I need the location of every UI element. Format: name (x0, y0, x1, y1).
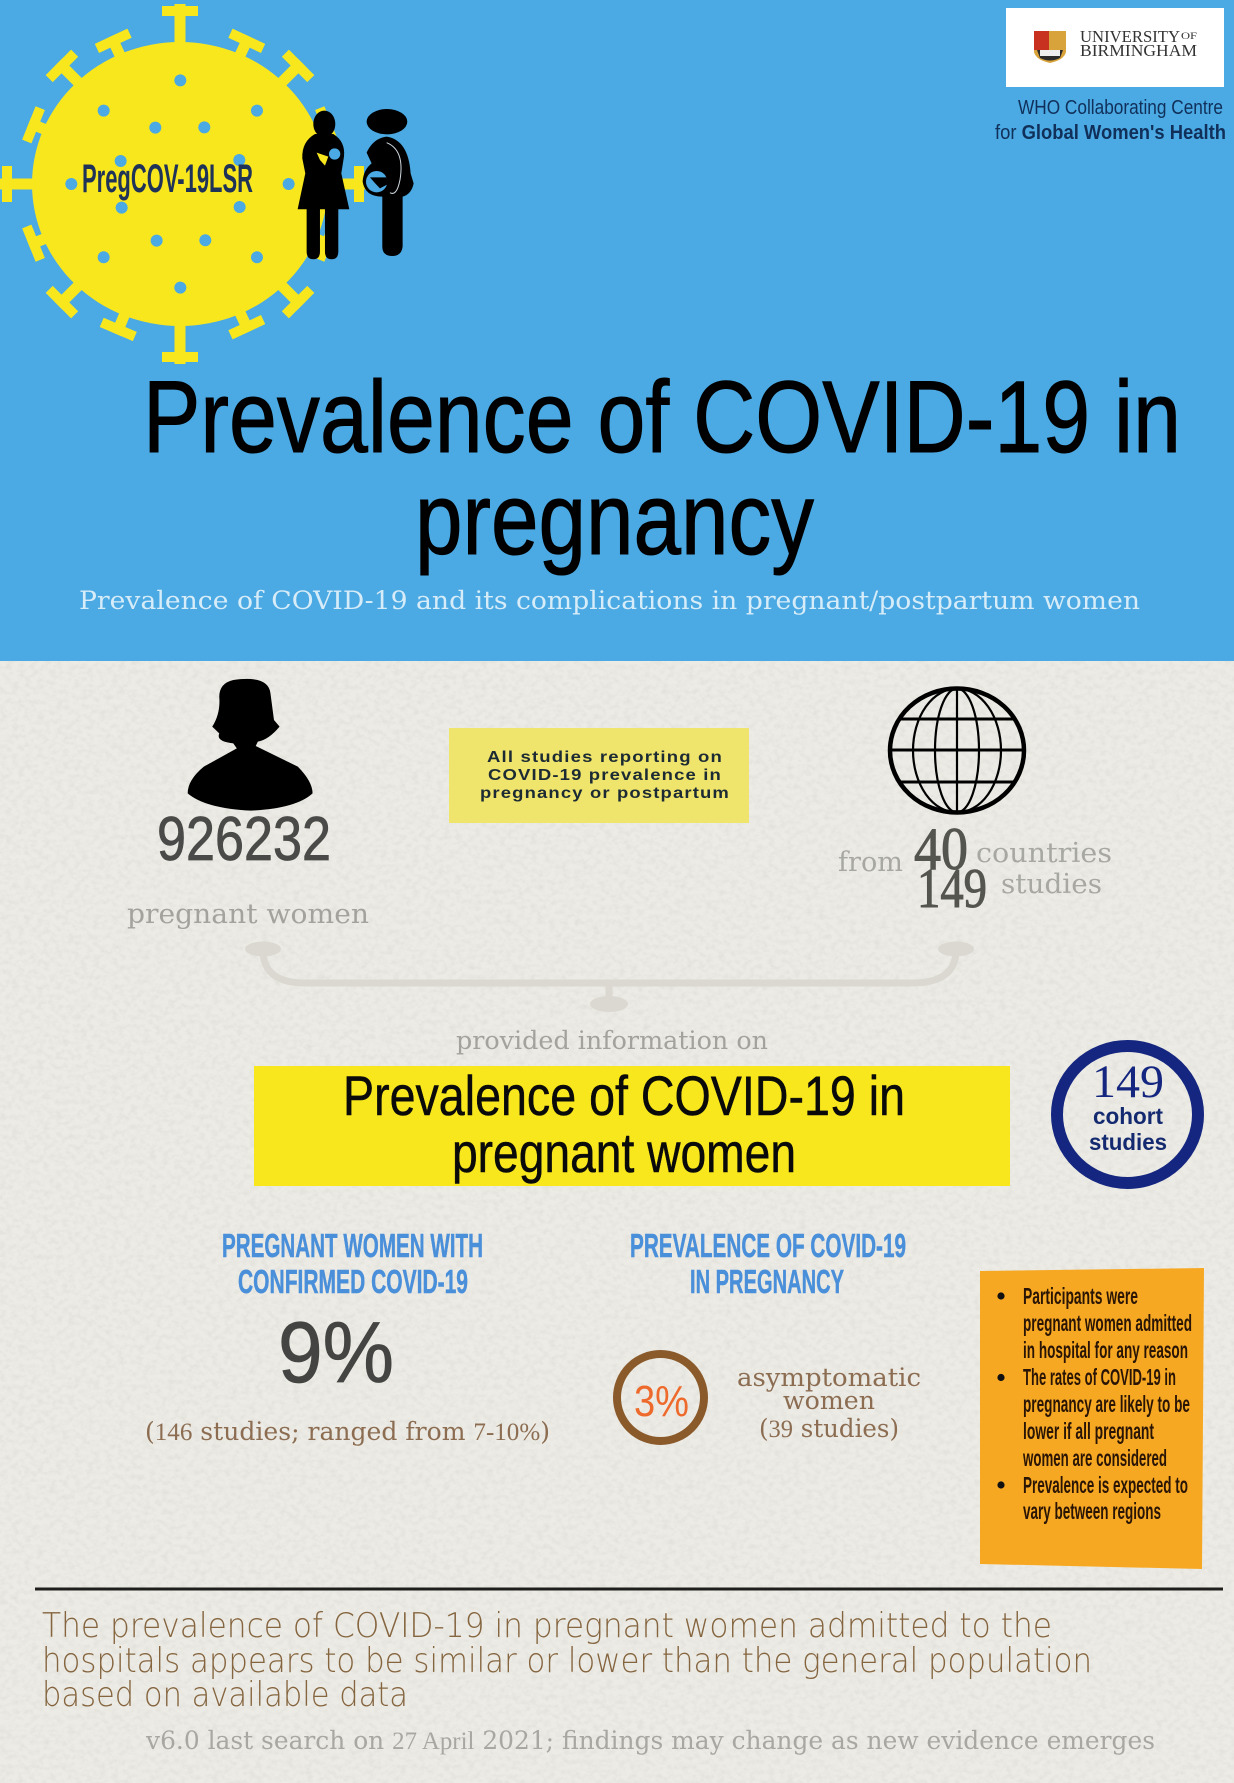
panel: heading prevalence in pregnant women: pregnant women (452, 1121, 796, 1184)
title: pregnancy (415, 462, 814, 576)
text: asymptomatic women: women (783, 1386, 875, 1415)
callout: study scope (449, 728, 749, 823)
subtitle: Prevalence of COVID-19 and its complications in pregnant/postpartum women (79, 586, 1140, 615)
badge: 149 cohort studies: cohort (1093, 1103, 1163, 1129)
badge: 3 percent (617, 1354, 704, 1441)
icon: coronavirus (0, 4, 366, 364)
count: pregnant women: 926232 (157, 805, 331, 874)
heading: pregnant women with confirmed COVID-19: CONFIRMED COVID-19 (238, 1263, 468, 1300)
count: pregnant women: pregnant women (127, 899, 369, 930)
icon: mother holding baby (298, 111, 349, 259)
panel: heading prevalence in pregnant women: Prevalence of COVID-19 in (343, 1064, 905, 1127)
callout: study scope: COVID-19 prevalence in (488, 767, 722, 784)
logo: University of Birmingham: BIRMINGHAM (1080, 41, 1197, 60)
heading: prevalence of COVID-19 in pregnancy: PREVALENCE OF COVID-19 (630, 1227, 906, 1264)
stat: 9 percent: 9% (278, 1305, 394, 1401)
heading: prevalence of COVID-19 in pregnancy: IN PREGNANCY (690, 1263, 844, 1300)
callout: study scope: All studies reporting on (487, 749, 723, 766)
text: provided information on: provided information on (456, 1026, 768, 1055)
count: countries and studies: studies (1001, 869, 1102, 900)
text: version note: v6.0 last search on 27 April 2021; findings may change as new evidence emerges (145, 1726, 1155, 1755)
title (143, 360, 1181, 576)
text: conclusion: hospitals appears to be similar or lower than the general population (42, 1641, 1092, 1681)
icon: woman silhouette (188, 679, 313, 811)
badge: 149 cohort studies (1057, 1046, 1198, 1183)
badge: 149 cohort studies: 149 (1092, 1056, 1164, 1108)
header panel (0, 0, 1234, 661)
icon: crest (1034, 31, 1066, 63)
note: 146 studies: (146 studies; ranged from 7-10%) (145, 1417, 550, 1446)
logo: University of Birmingham: OF (1181, 31, 1197, 41)
text: conclusion: based on available data (42, 1675, 408, 1715)
heading: prevalence of COVID-19 in pregnancy (630, 1227, 906, 1300)
text: conclusion (42, 1606, 1092, 1715)
icon: pregnant woman (363, 109, 414, 256)
heading: pregnant women with confirmed COVID-19 (222, 1227, 483, 1300)
text: asymptomatic women (737, 1363, 921, 1443)
count: countries and studies: countries (976, 838, 1112, 869)
arrow: connector bracket (245, 942, 974, 1012)
panel: notes: Participants were (1023, 1283, 1138, 1309)
badge: 3 percent: 3% (634, 1377, 689, 1426)
callout: study scope: pregnancy or postpartum (480, 785, 730, 802)
logo: University of Birmingham (1006, 8, 1224, 87)
text: asymptomatic women: (39 studies) (759, 1414, 899, 1443)
panel: notes (980, 1268, 1204, 1569)
count: countries and studies (838, 816, 1112, 920)
count: pregnant women (127, 805, 369, 930)
logo: University of Birmingham: UNIVERSITY (1080, 27, 1180, 46)
project label: PregCOV-19LSR (82, 157, 253, 201)
affiliation (995, 97, 1226, 144)
icon: globe (890, 688, 1024, 813)
panel: heading prevalence in pregnant women (254, 1064, 1010, 1186)
heading: pregnant women with confirmed COVID-19: PREGNANT WOMEN WITH (222, 1227, 483, 1264)
text: conclusion: The prevalence of COVID-19 in pregnant women admitted to the (42, 1606, 1052, 1646)
count: countries and studies: 40 (914, 816, 968, 882)
badge: 149 cohort studies: studies (1089, 1129, 1167, 1155)
count: countries and studies: 149 (917, 858, 987, 920)
count: countries and studies: from (838, 847, 903, 878)
text: asymptomatic women: asymptomatic (737, 1363, 921, 1392)
